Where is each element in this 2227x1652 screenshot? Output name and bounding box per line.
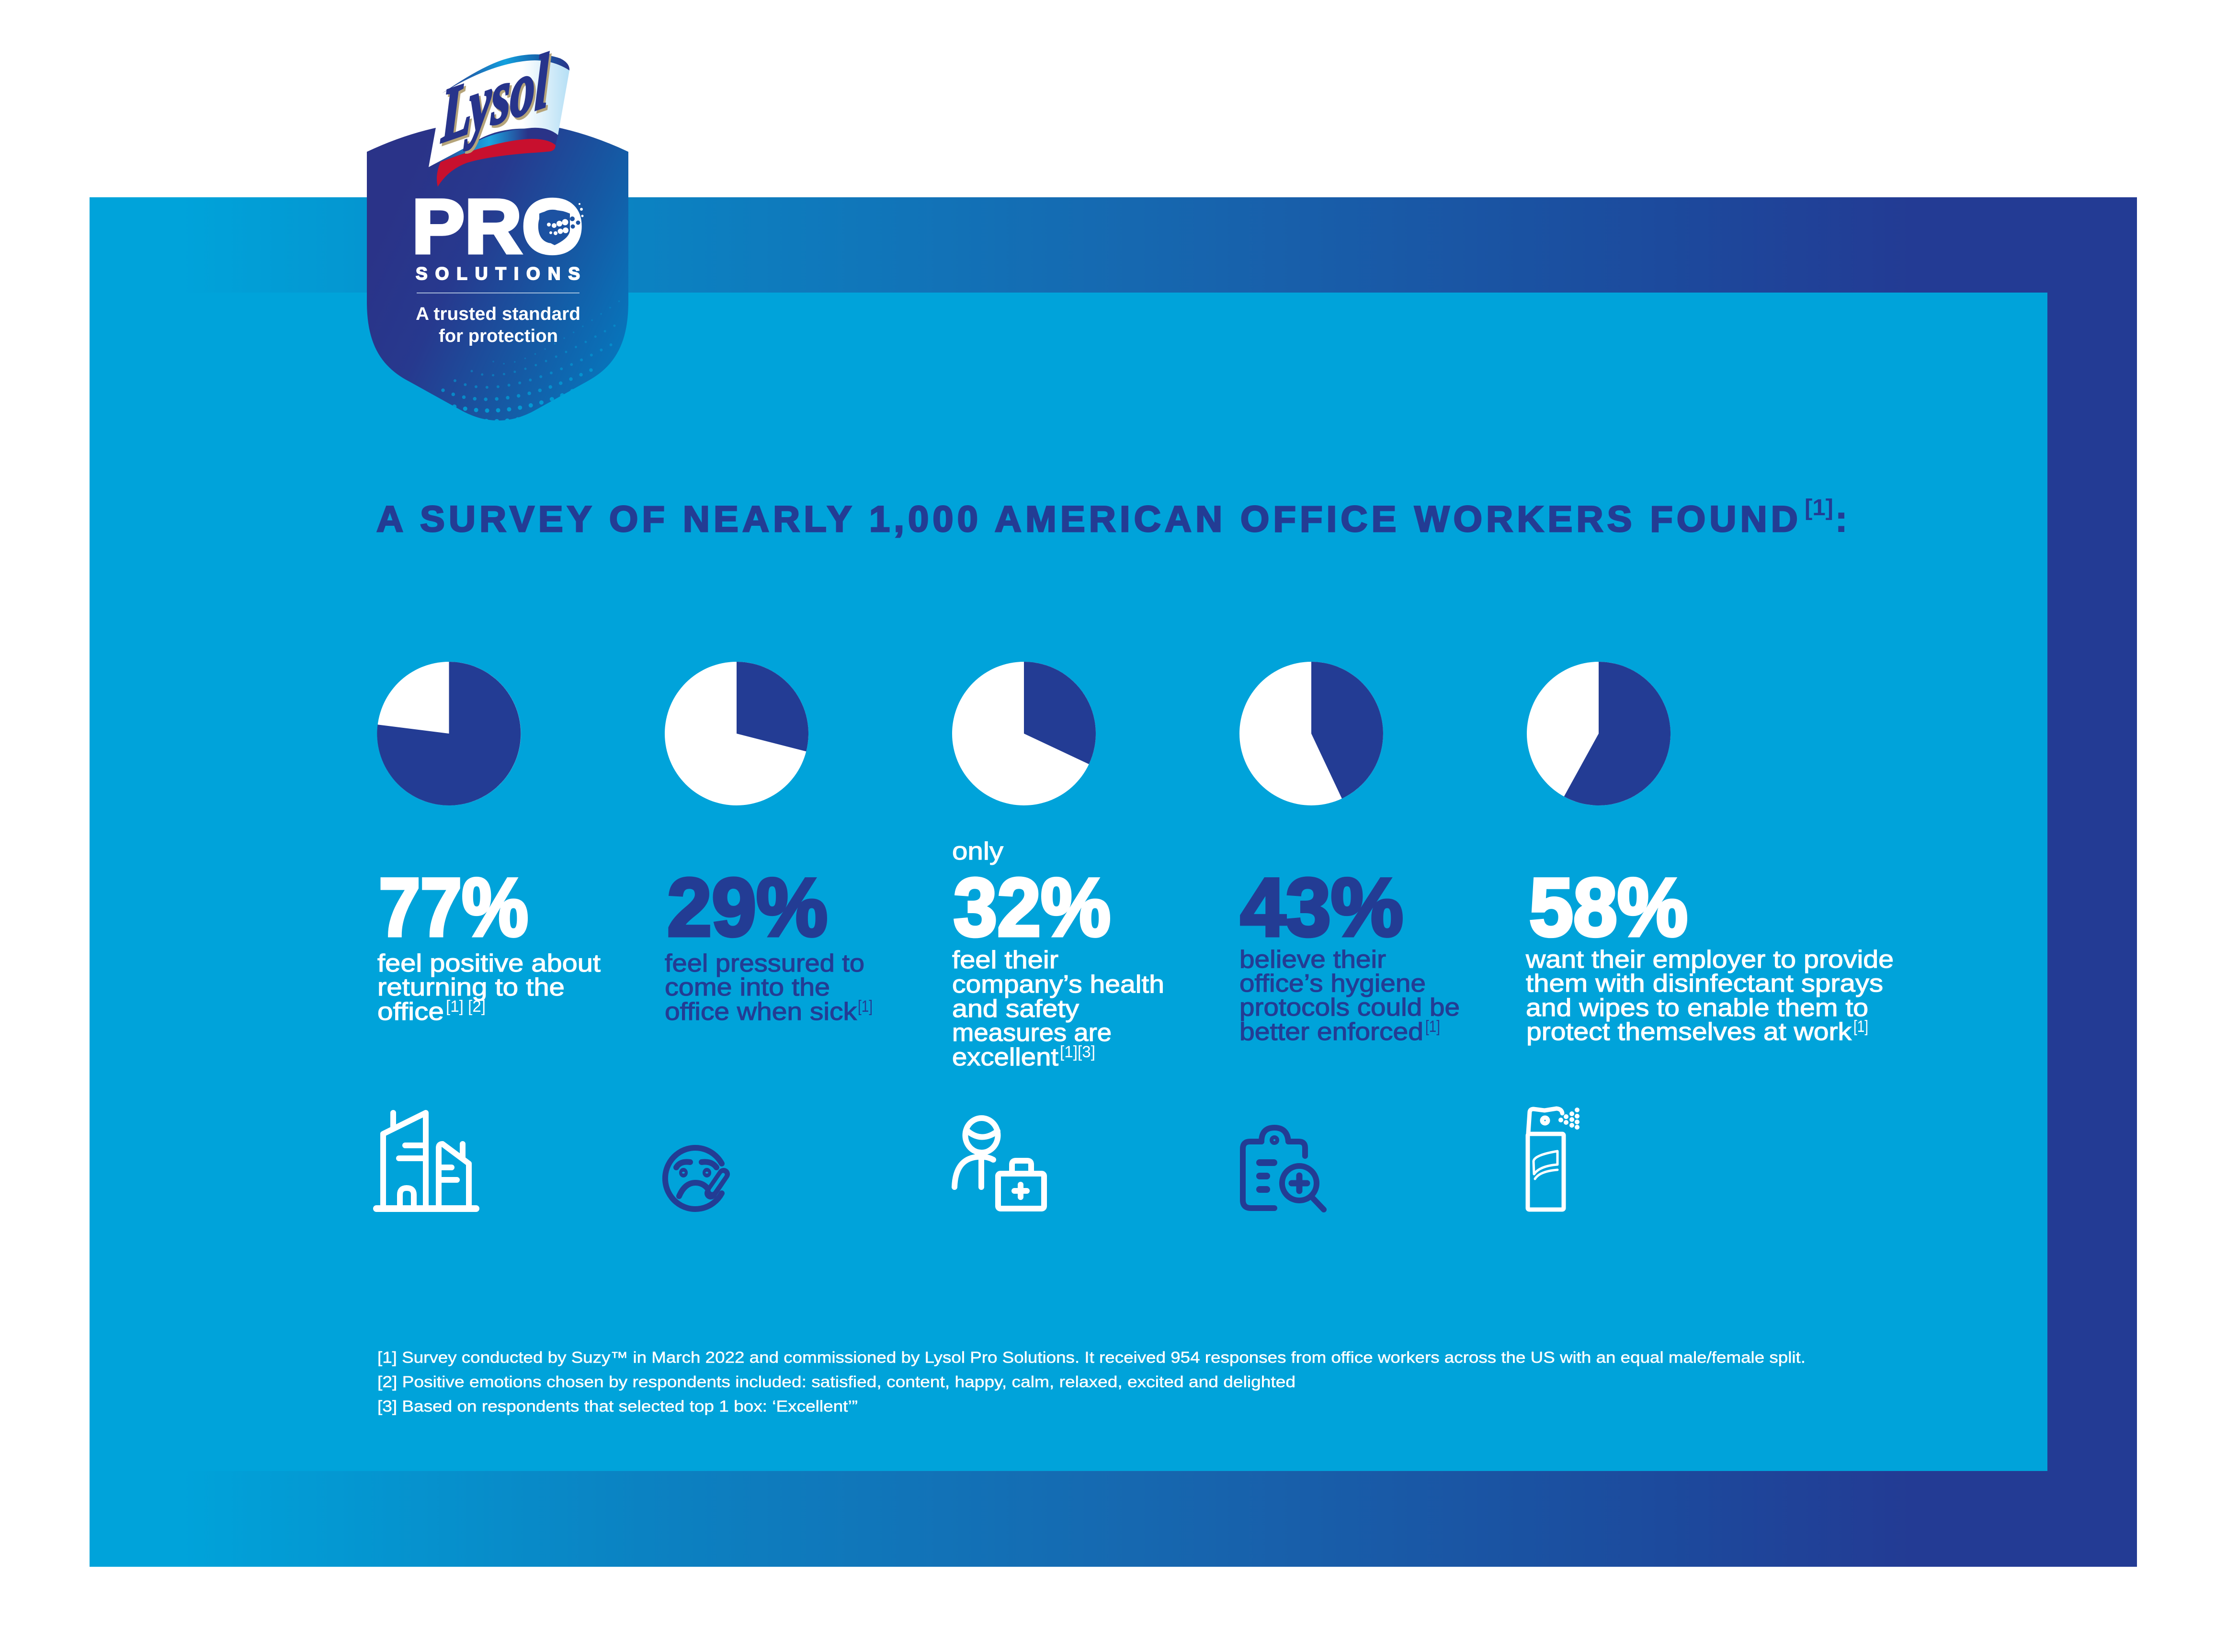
description: returning to the — [377, 973, 565, 1001]
footnotes — [377, 1348, 1806, 1415]
stat 58%: 58% — [1529, 861, 1688, 953]
flag bottom band — [429, 128, 558, 167]
pie chart 29% — [665, 662, 808, 805]
description: measures are — [952, 1019, 1112, 1047]
heading: [1] — [1805, 495, 1833, 520]
pie chart 43% — [1239, 662, 1383, 805]
icon: sick face with thermometer — [665, 1148, 724, 1209]
shield badge — [367, 121, 628, 420]
description: [1] [2] — [446, 997, 486, 1016]
description: come into the — [665, 973, 830, 1001]
description: protocols could be — [1239, 994, 1460, 1021]
icon: clipboard with magnifier — [1243, 1128, 1324, 1210]
description: protect themselves at work — [1526, 1018, 1852, 1046]
description: feel pressured to — [665, 950, 864, 977]
shield dot pattern — [441, 301, 620, 420]
icon: office buildings — [376, 1113, 476, 1209]
mini shield inside the O — [539, 203, 583, 245]
pie chart 32% — [952, 662, 1096, 805]
heading: : — [1835, 499, 1847, 540]
flag top band — [442, 55, 569, 93]
panel: 77% positive — [376, 662, 601, 1209]
description: office’s hygiene — [1239, 970, 1426, 997]
description: want their employer to provide — [1525, 946, 1894, 973]
footnotes: [2] Positive emotions chosen by respondents included: satisfied, content, happy, calm, relaxed, excited and delighted — [377, 1373, 1295, 1391]
description — [1525, 946, 1894, 1046]
description: company’s health — [952, 971, 1164, 998]
description — [952, 946, 1164, 1071]
description: [1][3] — [1060, 1043, 1095, 1061]
description — [1239, 946, 1460, 1046]
description: office when sick — [665, 998, 857, 1026]
description: and wipes to enable them to — [1526, 994, 1868, 1022]
stat 43%: 43% — [1240, 861, 1403, 953]
description: better enforced — [1239, 1018, 1423, 1046]
footnotes: [3] Based on respondents that selected top 1 box: ‘Excellent’” — [377, 1397, 858, 1415]
description: them with disinfectant sprays — [1526, 970, 1883, 997]
description: feel their — [952, 946, 1058, 974]
Lysol wordmark shadow: Lysol — [442, 40, 551, 161]
background frame — [90, 197, 2137, 1567]
logo: Lysol Pro Solutions shield — [367, 37, 628, 421]
description: [1] — [1853, 1018, 1868, 1036]
description — [377, 950, 601, 1026]
panel: 29% pressured — [665, 662, 873, 1209]
icon: disinfectant spray can — [1528, 1108, 1579, 1210]
footnotes: [1] Survey conducted by Suzy™ in March 2022 and commissioned by Lysol Pro Solutions. It received 954 responses from office workers across the US with an equal male/female split. — [377, 1348, 1806, 1366]
description: [1] — [1425, 1018, 1440, 1036]
red ribbon — [437, 137, 556, 187]
panel: 32% excellent — [952, 662, 1164, 1209]
panel: 58% disinfectant — [1525, 662, 1894, 1210]
Lysol wordmark: Lysol — [440, 37, 549, 159]
logo: Lysol Pro Solutions shield: for protection — [439, 326, 558, 346]
stat 77%: 77% — [379, 861, 528, 953]
tagline: A trusted standard — [416, 304, 580, 324]
description: [1] — [858, 997, 873, 1016]
description: feel positive about — [377, 950, 601, 977]
SOLUTIONS: SOLUTIONS — [416, 264, 580, 283]
panel: 43% hygiene — [1239, 662, 1460, 1210]
label only: only — [952, 837, 1003, 865]
description: believe their — [1239, 946, 1386, 973]
stat 29%: 29% — [667, 861, 828, 953]
description: excellent — [952, 1043, 1059, 1071]
PRO wordmark: PRO — [412, 183, 583, 269]
stat 32%: 32% — [954, 861, 1111, 953]
pie chart 58% — [1527, 662, 1670, 805]
icon: person with first aid kit — [954, 1118, 1044, 1209]
heading: A SURVEY OF NEARLY 1,000 AMERICAN OFFICE WORKERS FOUND — [376, 499, 1802, 540]
inner panel — [181, 293, 2047, 1471]
description — [665, 950, 873, 1026]
flag white panel — [429, 61, 569, 167]
description: and safety — [952, 995, 1079, 1023]
description: office — [377, 998, 444, 1026]
pie chart 77% — [377, 662, 521, 805]
